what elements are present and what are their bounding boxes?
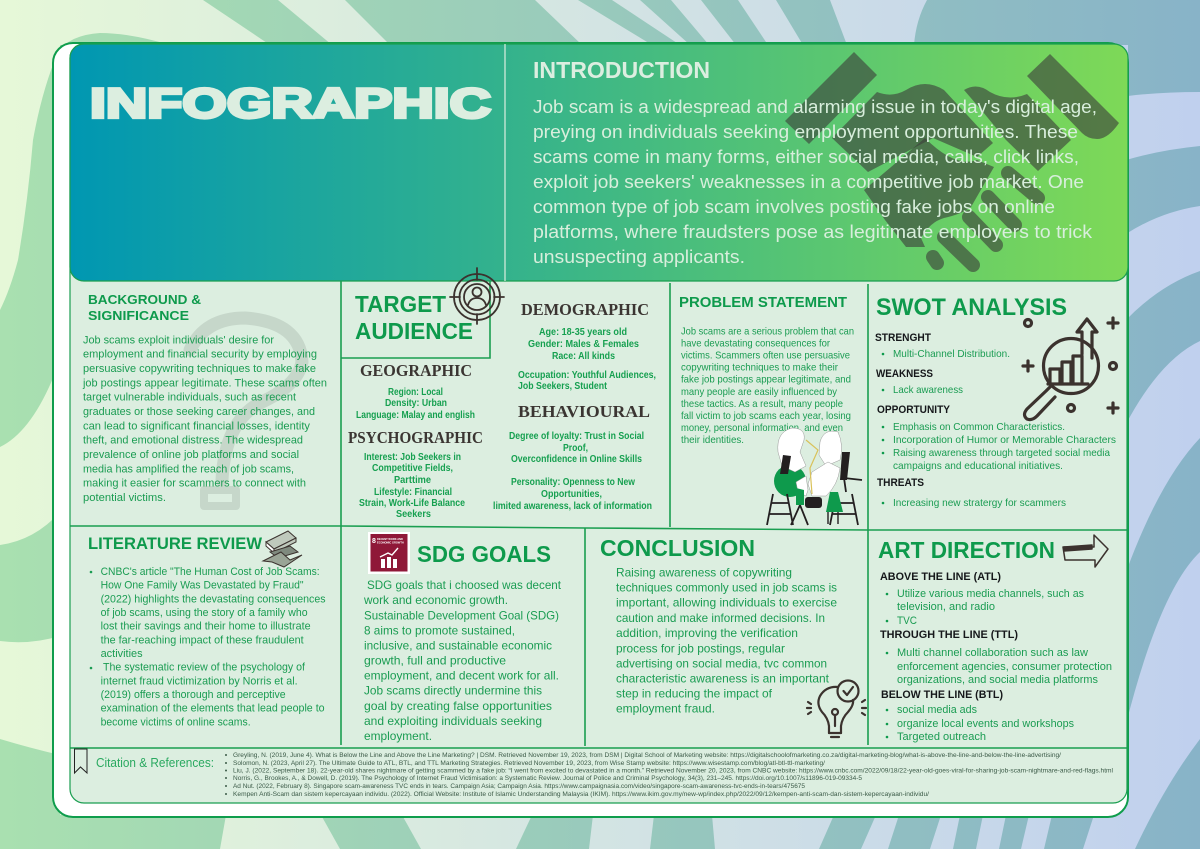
- pale green content panel: [70, 44, 1127, 803]
- text: problem statement body: fake job postings appear legitimate, and: [681, 375, 851, 386]
- text: literature bullets: internet fraud victimization by Norris et al.: [101, 675, 298, 687]
- text: conclusion body: addition, improving the verification: [616, 626, 798, 640]
- text: sdg body: Sustainable Development Goal (SDG): [364, 608, 559, 622]
- text: opportunity: [877, 404, 1116, 472]
- text: literature bullets: activities: [101, 648, 143, 660]
- text: reference list: Greyling, N. (2019, June 4). What is Below the Line and Above the Line Marketing? | DSM. Retrieved November 19, 2023, from DSM | Digital School of Marketing website: https://digitalschoolofmarketing.co.za/digital-marketing-blog/what-is-above-the-line-and-below-the-line-advertising/: [233, 752, 1061, 759]
- text: literature bullets: become victims of online scams.: [101, 716, 251, 728]
- text: above the line: television, and radio: [897, 601, 995, 613]
- text: background body: potential victims.: [83, 492, 166, 504]
- text: threats: THREATS: [877, 477, 924, 489]
- text: sdg body: inclusive, and sustainable economic: [364, 638, 552, 652]
- text: psychographic details: Strain, Work-Life Balance: [359, 498, 465, 509]
- heading: art direction: ART DIRECTION: [878, 537, 1055, 563]
- text: psychographic details: Competitive Fields,: [372, 463, 453, 474]
- panel: background and significance: [82, 292, 327, 506]
- text: conclusion body: [616, 566, 837, 716]
- heading: target audience: TARGET: [355, 291, 446, 317]
- heading: background: BACKGROUND &: [88, 292, 201, 307]
- heading: sdg goals: SDG GOALS: [417, 541, 551, 567]
- text: demographic details: Gender: Males & Females: [528, 339, 639, 350]
- text: strength: STRENGHT: [875, 332, 931, 344]
- text: weakness: [876, 368, 963, 396]
- icon: handshake: [785, 52, 1119, 265]
- heading: target audience: [355, 291, 473, 344]
- text: conclusion body: techniques commonly used in job scams is: [616, 581, 837, 595]
- text: above the line: ABOVE THE LINE (ATL): [880, 571, 1001, 583]
- text: demographic details: Age: 18-35 years old: [539, 327, 627, 338]
- text: weakness: WEAKNESS: [876, 368, 933, 380]
- heading: citation: Citation & References:: [96, 755, 214, 770]
- text: introduction body: common type of job scam involves posting fake jobs on online: [533, 196, 1055, 217]
- heading: swot analysis: SWOT ANALYSIS: [876, 294, 1067, 321]
- icon: bookmark: [74, 749, 87, 773]
- text: conclusion body: characteristic awareness is an important: [616, 672, 830, 686]
- heading: psychographic: PSYCHOGRAPHIC: [348, 428, 483, 447]
- text: problem statement body: [681, 326, 854, 446]
- heading: behavioural: BEHAVIOURAL: [518, 402, 650, 421]
- text: psychographic details: Seekers: [396, 509, 431, 520]
- text: reference list: Norris, G., Brookes, A., & Dowell, D. (2019). The Psychology of Internet Fraud Victimisation: a Systematic Review. Journal of Police and Criminal Psychology, 34(3), 231–245. https://doi.org/10.1007/s11896-019-09334-5: [233, 775, 863, 782]
- text: problem statement body: victims. Scammers often use persuasive: [681, 350, 850, 362]
- text: above the line: [880, 571, 1084, 627]
- icon: people assembling light bulb puzzle: [767, 428, 862, 525]
- heading: demographic: DEMOGRAPHIC: [521, 300, 649, 319]
- text: literature bullets: lost their savings and their home to illustrate: [101, 621, 311, 633]
- icon: sdg 8 badge: 8: [372, 538, 376, 545]
- text: threats: Increasing new stratergy for scammers: [893, 498, 1066, 509]
- text: reference list: [225, 752, 1113, 798]
- text: demographic details: Occupation: Youthful Audiences,: [518, 370, 656, 381]
- text: opportunity: campaigns and educational initiatives.: [893, 461, 1063, 472]
- text: problem statement body: many people are easily influenced by: [681, 387, 838, 398]
- icon: clapperboard arrow: [1063, 535, 1108, 567]
- text: literature bullets: How One Family Was Devastated by Fraud": [101, 580, 304, 592]
- panel: target audience: [348, 268, 656, 520]
- text: literature bullets: examination of the elements that lead people to: [101, 703, 325, 715]
- text: conclusion body: employment fraud.: [616, 702, 715, 716]
- text: introduction body: unsuspecting applicants.: [533, 246, 745, 267]
- text: psychographic details: Lifestyle: Financial: [374, 487, 452, 498]
- text: strength: Multi-Channel Distribution.: [893, 349, 1010, 360]
- text: sdg body: work and economic growth.: [363, 593, 508, 607]
- text: conclusion body: advertising on social media, tvc common: [616, 656, 827, 670]
- text: reference list: Liu, J. (2022, September 18). 22-year-old shares nightmare of getting scammed by a fake job: “I went from excited to devastated in a month.” Retrieved November 20, 2023, from CNBC website: https://www.cnbc.com/2022/09/18/22-year-old-goes-viral-for-sharing-job-scam-nightmare-and-red-flags.html: [233, 768, 1113, 774]
- text: sdg body: growth, full and productive: [364, 653, 506, 667]
- text: conclusion body: Raising awareness of copywriting: [616, 566, 792, 580]
- text: introduction body: Job scam is a widespread and alarming issue in today's digital age,: [533, 96, 1097, 117]
- text: psychographic details: Interest: Job Seekers in: [364, 452, 461, 463]
- text: problem statement body: money, personal information, and even: [681, 423, 843, 434]
- icon: target with person: [450, 268, 504, 324]
- text: background body: can lead to significant financial losses, identity: [83, 420, 310, 432]
- text: opportunity: Raising awareness through targeted social media: [893, 448, 1110, 459]
- panel: citation and references: [74, 749, 1113, 798]
- icon: magnifier with growth chart: [1023, 318, 1118, 420]
- text: below the line: organize local events and workshops: [897, 718, 1074, 730]
- text: literature bullets: CNBC's article "The Human Cost of Job Scams:: [101, 566, 320, 578]
- text: behavioural details: Opportunities,: [541, 489, 602, 500]
- heading: target audience: AUDIENCE: [355, 318, 473, 344]
- text: reference list: Solomon, N. (2023, April 27). The Ultimate Guide to ATL, BTL, and TTL Marketing Strategies. Retrieved November 19, 2023, from Wise Stamp website: https://www.wisestamp.com/blog/atl-btl-ttl-marketing/: [233, 760, 825, 767]
- text: introduction body: [533, 96, 1097, 267]
- text: conclusion body: step in reducing the impact of: [616, 687, 773, 701]
- icon: sdg 8 badge: ECONOMIC GROWTH: [377, 540, 404, 544]
- text: background body: prevalence of online job platforms and social: [83, 449, 299, 461]
- heading: literature review: LITERATURE REVIEW: [88, 535, 262, 553]
- text: opportunity: OPPORTUNITY: [877, 404, 951, 416]
- panel: problem statement: [679, 294, 862, 525]
- text: sdg body: employment, and decent work for all.: [364, 669, 559, 683]
- text: background body: making it easier for scammers to connect with: [83, 478, 306, 490]
- text: below the line: [881, 689, 1074, 743]
- text: below the line: BELOW THE LINE (BTL): [881, 689, 1003, 701]
- text: opportunity: Emphasis on Common Characteristics.: [893, 422, 1065, 433]
- text: background body: graduates or those seeking career changes, and: [83, 406, 315, 418]
- panel: swot analysis: [875, 294, 1118, 509]
- text: demographic details: [518, 327, 656, 392]
- text: psychographic details: Parttime: [394, 475, 431, 486]
- panel: literature review: [88, 531, 326, 728]
- icon: light bulb with check: [807, 680, 866, 737]
- heading: problem statement: PROBLEM STATEMENT: [679, 294, 847, 311]
- text: introduction body: scams come in many forms, either social media, calls, click links,: [533, 146, 1079, 167]
- text: literature bullets: [90, 566, 326, 728]
- text: above the line: Utilize various media channels, such as: [897, 588, 1084, 600]
- text: psychographic details: [359, 452, 465, 520]
- text: background body: employment and financial security by employing: [83, 349, 317, 361]
- text: background body: theft, and emotional distress. The widespread: [83, 435, 303, 447]
- text: behavioural details: Overconfidence in Online Skills: [511, 454, 642, 465]
- text: reference list: Kempen Anti-Scam dan sistem kepercayaan individu. (2022). Official Website: Institute of Islamic Understanding Malaysia (IKIM). https://www.ikim.gov.my/new-wp/index.php/2022/09/12/kempen-anti-scam-dan-sistem-kepercayaan-individu/: [233, 791, 929, 798]
- text: literature bullets: The systematic review of the psychology of: [103, 662, 306, 674]
- text: through the line: organizations, and social media platforms: [897, 674, 1098, 686]
- text: above the line: TVC: [897, 615, 917, 627]
- text: through the line: Multi channel collaboration such as law: [897, 647, 1088, 659]
- icon: question mark watermark: [190, 318, 302, 506]
- text: geographic details: Language: Malay and english: [356, 410, 475, 421]
- text: behavioural details: [493, 431, 652, 512]
- text: weakness: Lack awareness: [893, 385, 963, 396]
- panel: sdg goals: [363, 532, 562, 743]
- text: sdg body: employment.: [364, 729, 432, 743]
- text: problem statement body: have devastating consequences for: [681, 338, 831, 349]
- text: geographic details: [356, 387, 475, 421]
- text: sdg body: [363, 578, 562, 743]
- text: through the line: [880, 629, 1112, 686]
- text: through the line: THROUGH THE LINE (TTL): [880, 629, 1018, 641]
- text: below the line: social media ads: [897, 704, 977, 716]
- text: through the line: enforcement agencies, consumer protection: [897, 661, 1112, 673]
- panel: conclusion: [600, 535, 866, 737]
- text: reference list: Ad Nut. (2022, February 8). Singapore scam-awareness TVC ends in tears. Campaign Asia; Campaign Asia. https://www.campaignasia.com/video/singapore-scam-awareness-tvc-ends-in-tears/475675: [233, 783, 806, 790]
- text: introduction body: platforms, where fraudsters pose as legitimate employers to trick: [533, 221, 1093, 242]
- text: conclusion body: important, allowing individuals to exercise: [616, 596, 837, 610]
- text: background body: persuasive copywriting techniques to make fake: [83, 363, 316, 375]
- text: sdg body: Job scams directly undermine this: [364, 684, 542, 698]
- heading: introduction: INTRODUCTION: [533, 57, 710, 83]
- text: sdg body: 8 aims to promote sustained,: [364, 623, 515, 637]
- text: sdg body: and exploiting individuals seeking: [364, 714, 542, 728]
- heading: geographic: GEOGRAPHIC: [360, 361, 472, 380]
- text: strength: [875, 332, 1010, 360]
- icon: sdg 8 badge: [368, 532, 410, 574]
- text: demographic details: Race: All kinds: [552, 351, 615, 362]
- text: literature bullets: (2019) offers a thorough and perceptive: [101, 689, 286, 701]
- text: sdg body: goal by creating false opportunities: [364, 699, 552, 713]
- text: background body: [82, 334, 327, 504]
- heading: background: [88, 292, 201, 323]
- text: background body: job postings appear legitimate. These scams often: [82, 377, 327, 389]
- text: introduction body: preying on individuals seeking employment opportunities. These: [533, 121, 1078, 142]
- text: geographic details: Region: Local: [388, 387, 443, 398]
- text: problem statement body: Job scams are a serious problem that can: [681, 326, 854, 337]
- text: opportunity: Incorporation of Humor or Memorable Characters: [893, 435, 1116, 446]
- text: literature bullets: the far-reaching impact of these fraudulent: [101, 634, 304, 646]
- text: demographic details: Job Seekers, Student: [518, 381, 608, 392]
- text: literature bullets: (2022) highlights the devastating consequences: [101, 593, 326, 605]
- panel: header banner: [70, 44, 1128, 281]
- text: behavioural details: Degree of loyalty: Trust in Social: [509, 431, 644, 442]
- text: introduction body: exploit job seekers' weaknesses in a competitive job market. One: [533, 171, 1084, 192]
- text: geographic details: Density: Urban: [385, 398, 447, 409]
- text: behavioural details: Personality: Openness to New: [511, 477, 635, 488]
- text: below the line: Targeted outreach: [897, 731, 986, 743]
- text: background body: media has amplified the reach of job scams,: [83, 463, 294, 475]
- text: literature bullets: of job scams, using the story of a family who: [101, 607, 308, 619]
- icon: sdg 8 badge: DECENT WORK AND: [377, 537, 403, 541]
- panel: art direction: [878, 535, 1112, 743]
- text: problem statement body: fall victim to job scams each year, losing: [681, 411, 851, 422]
- text: problem statement body: their identities.: [681, 435, 744, 446]
- heading: conclusion: CONCLUSION: [600, 535, 755, 561]
- text: problem statement body: these tactics. As a result, many people: [681, 399, 843, 410]
- text: conclusion body: caution and make informed decisions. In: [616, 611, 825, 625]
- title: INFOGRAPHIC: [90, 80, 491, 126]
- text: background body: target vulnerable individuals, such as recent: [83, 392, 297, 404]
- icon: stack of books: [263, 531, 302, 567]
- text: behavioural details: limited awareness, lack of information: [493, 501, 652, 512]
- text: background body: Job scams exploit individuals' desire for: [83, 334, 274, 346]
- heading: background: SIGNIFICANCE: [88, 308, 189, 323]
- text: problem statement body: copywriting techniques to make their: [681, 363, 839, 374]
- text: behavioural details: Proof,: [563, 443, 588, 454]
- text: threats: [877, 477, 1066, 509]
- text: conclusion body: process for job postings, regular: [616, 641, 785, 655]
- text: sdg body: SDG goals that i choosed was decent: [367, 578, 562, 592]
